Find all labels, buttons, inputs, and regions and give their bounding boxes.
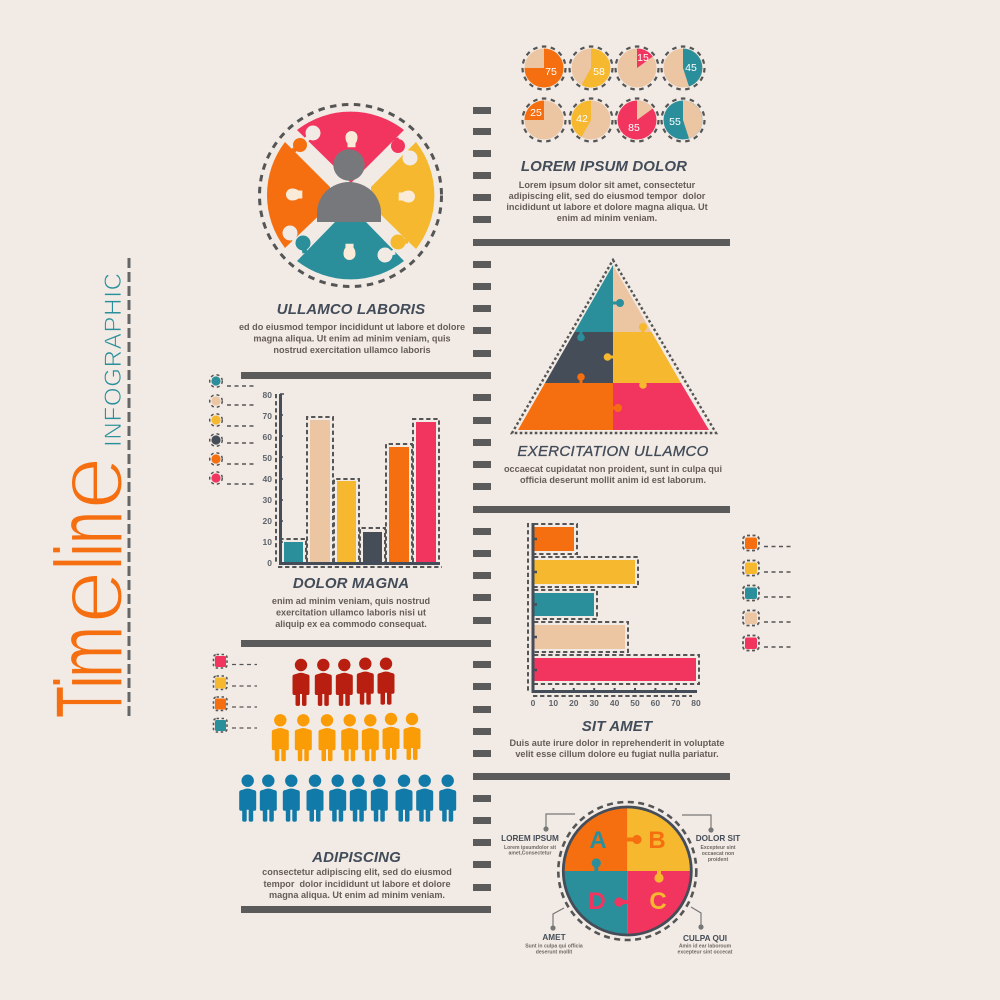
text block: dolor magna: aliquip ex ea commodo consequat. [275,619,427,629]
pie 85: 85 [628,122,640,134]
callout: amet [525,908,583,956]
callout: culpa qui: Amin id ear laboroum [679,944,732,950]
people row: orange [272,713,420,761]
text block: ullamco laboris: ed do eiusmod tempor incididunt ut labore et dolore [239,322,465,332]
text block: adipiscing: consectetur adipiscing elit, sed do eiusmod [262,867,452,877]
title: Timeline: i [36,543,143,557]
callout: lorem ipsum: LOREM IPSUM [501,834,559,843]
text block: exercitation ullamco: occaecat cupidatat non proident, sunt in culpa qui [504,464,722,474]
pie 45: 45 [685,62,697,74]
axis labels: 50 [263,453,272,463]
title: Timeline: n [36,511,143,544]
teal puzzle piece [297,222,404,279]
people row: blue [239,774,456,822]
callout: dolor sit: Excepteur sint [700,845,736,851]
text block: sit amet: Duis aute irure dolor in reprehenderit in voluptate [510,738,724,748]
bars [284,420,436,562]
text block: adipiscing: magna aliqua. Ut enim ad minim veniam. [269,890,445,900]
title: Timeline: i [36,675,143,689]
panel: puzzle circle ABCD [558,802,696,940]
callout: dolor sit [682,815,740,863]
axis labels: 40 [610,698,620,708]
callout: amet: deserunt mollit [536,950,573,956]
heading: ULLAMCO LABORIS: ULLAMCO LABORIS [277,301,425,318]
heading: SIT AMET: SIT AMET [582,718,654,735]
pink puzzle piece [297,112,404,183]
text block: lorem ipsum dolor: Lorem ipsum dolor sit amet, consectetur [519,180,696,190]
title: Timeline [36,456,143,718]
panel: puzzle pyramid [512,260,716,433]
callout: lorem ipsum: amet,Consectetur [508,850,552,856]
axis labels [531,698,701,708]
axes [533,523,697,692]
axis labels: 50 [630,698,640,708]
callout: lorem ipsum [501,814,575,856]
callout: culpa qui: excepteur sint occecat [678,950,733,956]
text block: adipiscing: tempor dolor incididunt ut labore et dolore [263,879,451,889]
icons: bulb holes [286,131,415,260]
pie 55: 55 [669,116,681,128]
callout: amet: AMET [542,933,566,942]
axis labels: 20 [263,516,272,526]
axis labels: 80 [691,698,701,708]
callout: culpa qui: CULPA QUI [683,934,727,943]
pie 42 [571,100,610,140]
heading: DOLOR MAGNA: DOLOR MAGNA [293,575,409,592]
text block: dolor magna: exercitation ullamco laboris nisi ut [276,608,426,618]
pie 55 [664,100,702,140]
pie 42: 42 [576,113,588,125]
axis labels: 70 [263,411,272,421]
heading: EXERCITATION ULLAMCO: EXERCITATION ULLAMCO [517,443,709,460]
horizontal bar chart: sit amet [528,523,701,708]
pie 15: 15 [637,52,649,64]
axis labels: 70 [671,698,681,708]
text block: sit amet: velit esse cillum dolore eu fugiat nulla pariatur. [515,749,719,759]
orange puzzle piece [267,142,330,248]
axis labels: 40 [263,474,272,484]
axis labels: 30 [263,495,272,505]
callout: dolor sit: proident [708,857,728,863]
pie 25 [524,100,564,140]
axes [280,394,440,564]
heading: ADIPISCING: ADIPISCING [311,849,401,866]
title: Timeline: l [36,556,143,570]
title: Timeline: e [36,570,143,624]
text block: lorem ipsum dolor: enim ad minim veniam. [557,213,657,223]
title: Timeline: e [36,456,143,510]
axis labels: 0 [267,558,272,568]
people row: red [292,658,394,706]
axis labels [263,390,272,568]
panel: puzzle circle with person [260,104,442,286]
callout: culpa qui [678,907,733,956]
pie 75: 75 [545,66,557,78]
axis labels: 20 [569,698,579,708]
panel: puzzle circle ABCD: A [589,827,607,854]
axis labels: 10 [549,698,558,708]
subtitle: INFOGRAPHIC: INFOGRAPHIC [100,273,127,447]
axis labels: 10 [263,537,272,547]
pie 85 [618,100,656,140]
pie 45 [664,48,702,88]
panel: puzzle circle ABCD: D [588,888,606,915]
legend: horizontal bar chart [743,536,792,650]
title: Timeline: T [36,686,143,718]
callout: dolor sit: DOLOR SIT [696,834,740,843]
panel: pie charts [522,46,704,142]
text block: ullamco laboris: nostrud exercitation ullamco laboris [273,345,431,355]
bars [534,527,696,681]
text block: lorem ipsum dolor: incididunt ut labore et dolore magna aliqua. Ut [506,202,708,212]
callout: amet: Sunt in culpa qui officia [525,944,583,950]
pie 25: 25 [530,107,542,119]
legend: bar chart [210,375,256,484]
icon: person [317,149,381,222]
axis labels: 30 [589,698,599,708]
pie 58 [572,48,610,88]
title: Timeline: m [36,626,143,678]
axis labels: 80 [263,390,272,400]
yellow puzzle piece [371,142,434,249]
legend: people [214,654,257,732]
text block: ullamco laboris: magna aliqua. Ut enim ad minim veniam, quis [253,334,451,344]
text block: exercitation ullamco: officia deserunt mollit anim id est laborum. [520,475,706,485]
chart: people rows [239,658,456,822]
text block: lorem ipsum dolor: adipiscing elit, sed do eiusmod tempor dolor [509,191,706,201]
callout: lorem ipsum: Lorem ipsumdolor sit [504,845,556,851]
panel: puzzle circle ABCD: B [648,827,666,854]
axis labels: 0 [531,698,536,708]
callout: dolor sit: occaecat non [702,851,734,857]
heading: LOREM IPSUM DOLOR: LOREM IPSUM DOLOR [521,158,687,175]
pie 15 [618,48,656,88]
axis labels: 60 [651,698,660,708]
pie 58: 58 [593,66,605,78]
panel: puzzle circle ABCD: C [649,888,667,915]
bar chart: dolor magna [263,390,442,568]
text block: dolor magna: enim ad minim veniam, quis nostrud [272,596,430,606]
axis labels: 60 [263,432,272,442]
pie 75 [524,48,564,88]
